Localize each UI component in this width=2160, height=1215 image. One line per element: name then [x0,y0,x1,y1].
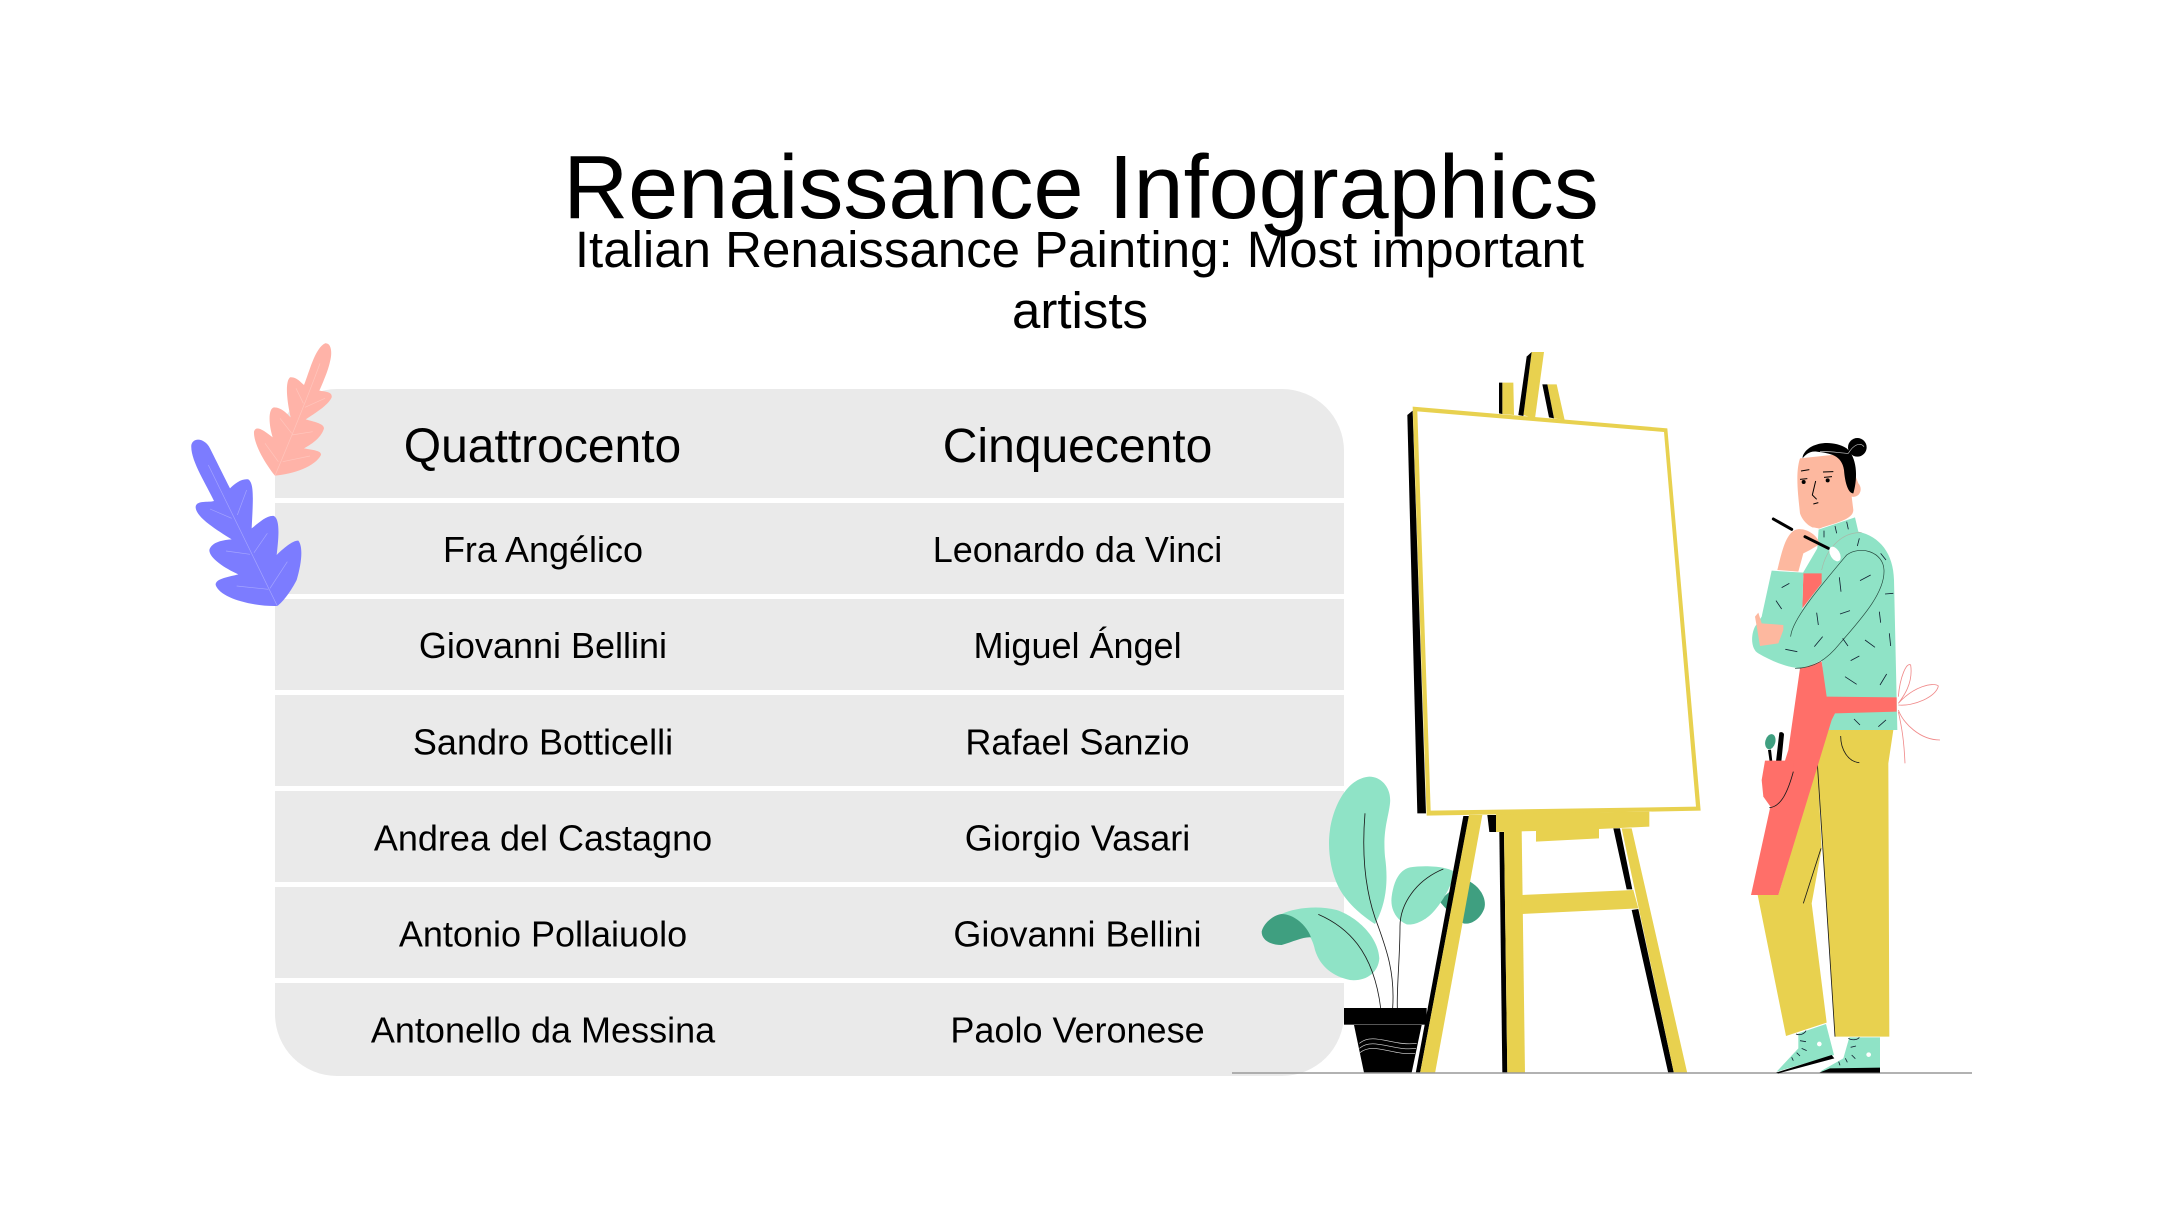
icon: pink leaf [254,343,332,476]
icon: painter figure [1751,438,1940,1073]
table row 5: Antonio Pollaiuolo [399,914,687,954]
sweater torso [1800,517,1897,730]
table row 1 [275,503,1344,594]
apron bow [1898,665,1940,763]
table row 4: Andrea del Castagno [374,818,712,858]
trousers [1758,730,1893,1037]
table row 6: Antonello da Messina [371,1010,716,1050]
subtitle: Italian Renaissance Painting: Most important [575,221,1584,278]
table row 3: Rafael Sanzio [965,722,1190,762]
subtitle: artists [1012,282,1148,339]
table row 5: Giovanni Bellini [953,914,1202,954]
table: artists [275,389,1344,1076]
neck, head and hair [1797,438,1867,529]
easel top posts [1499,352,1565,420]
table row 3 [275,695,1344,786]
apron [1751,573,1897,895]
icon: blue leaf [191,440,301,606]
table row: header: Quattrocento [404,420,681,473]
white shirt collar [1796,527,1819,573]
table row 2: Miguel Ángel [973,625,1182,666]
table row 2 [275,599,1344,690]
table row 5 [275,887,1344,978]
table row 1: Leonardo da Vinci [933,529,1222,570]
table row 1: Fra Angélico [443,529,643,570]
easel legs and tray [1416,812,1687,1073]
lower hand [1755,613,1783,646]
raised hand [1777,529,1820,572]
icon: potted plant [1262,777,1485,1073]
apron pocket and brushes [1762,732,1794,808]
sweater ticks [1776,522,1893,727]
table row: header: Cinquecento [943,420,1212,473]
table row 6: Paolo Veronese [950,1010,1205,1050]
sweater arms [1752,548,1884,668]
canvas [1407,407,1701,816]
ground line [1232,1072,1972,1074]
table row 3: Sandro Botticelli [413,722,673,762]
paintbrush [1773,519,1843,563]
subtitle [575,221,1584,339]
table row 4 [275,791,1344,882]
icon: easel with blank canvas [1407,352,1701,1073]
shoes [1777,1024,1880,1072]
table row: header [275,389,1344,498]
title: Renaissance Infographics [563,138,1599,238]
table row 4: Giorgio Vasari [965,818,1190,858]
table row 6 [275,983,1344,1076]
table row 2: Giovanni Bellini [419,625,667,666]
